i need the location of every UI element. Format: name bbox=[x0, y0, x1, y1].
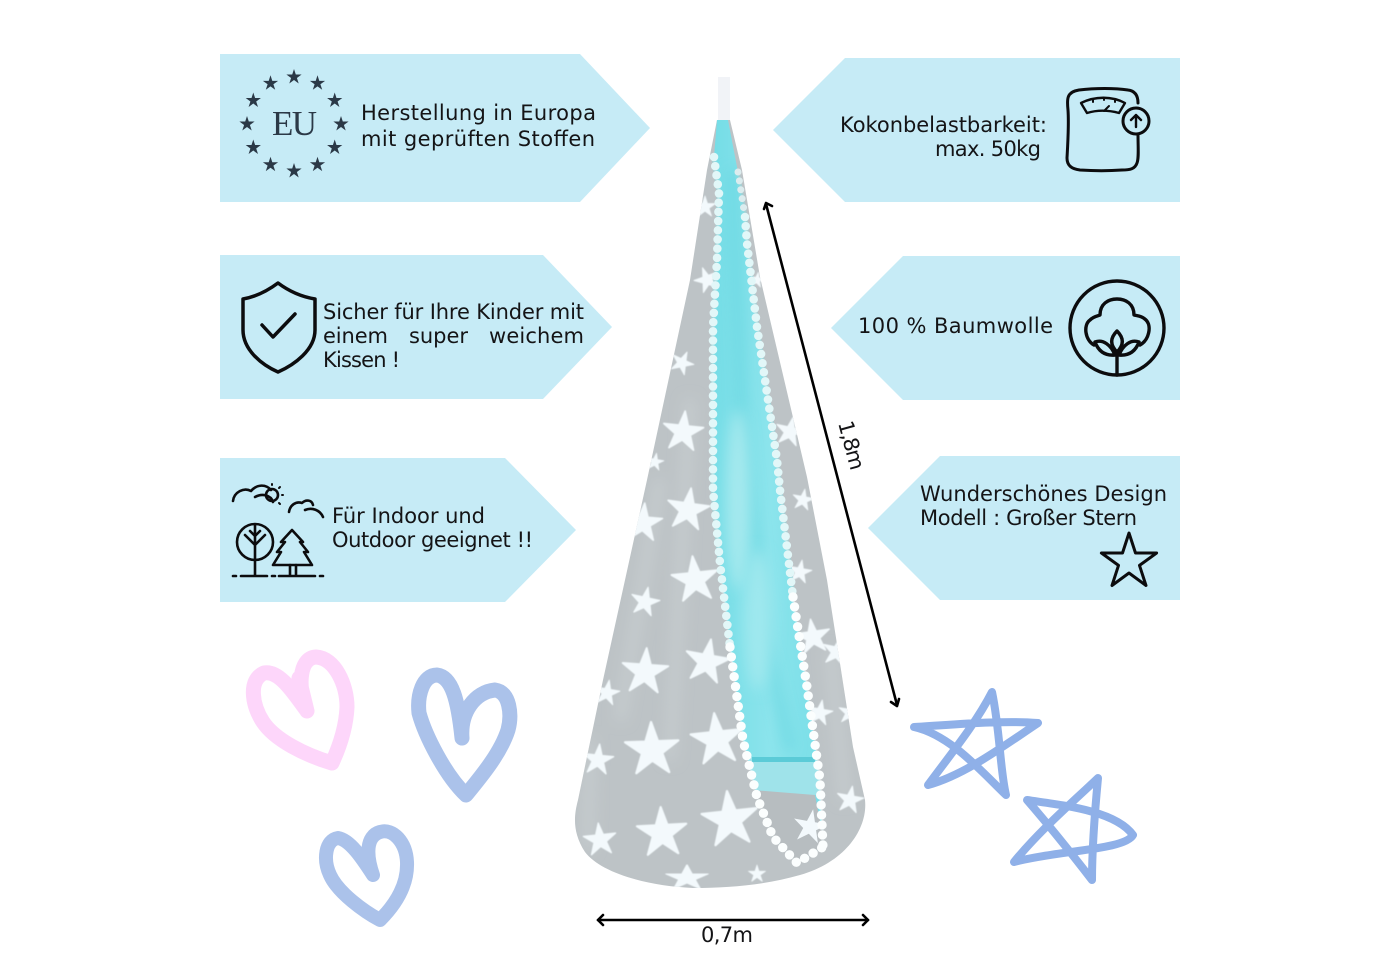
text: Kokonbelastbarkeit: max. 50kg bbox=[935, 137, 1041, 161]
label: height 1,8m: 1,8m bbox=[833, 418, 869, 473]
hanging cocoon photo bbox=[575, 77, 866, 888]
banner: 100 % Baumwolle bbox=[831, 256, 1180, 400]
doodle: pink heart bbox=[253, 657, 347, 763]
seat star bbox=[794, 810, 820, 843]
cocoon strap bbox=[718, 77, 730, 121]
doodle: small blue heart bbox=[326, 831, 407, 920]
cocoon body bbox=[575, 120, 866, 888]
doodle: blue heart bbox=[419, 675, 510, 795]
banner: Indoor und Outdoor bbox=[220, 458, 576, 602]
icon: shield with check bbox=[243, 283, 315, 372]
text: Herstellung in Europa: Herstellung in Europa bbox=[361, 101, 596, 125]
icon: cotton flower bbox=[1070, 281, 1164, 375]
icon: EU stars bbox=[239, 69, 349, 177]
cocoon pompoms bbox=[713, 157, 823, 863]
doodle: blue star two bbox=[1014, 778, 1133, 880]
arrow: width bbox=[598, 915, 868, 925]
doodle: blue star one bbox=[914, 692, 1038, 795]
banner: Wunderschönes Design bbox=[868, 456, 1180, 600]
cocoon teal interior bbox=[713, 120, 823, 856]
text: Sicher für Ihre Kinder: super bbox=[409, 324, 468, 348]
text: Sicher für Ihre Kinder: Sicher für Ihre Kinder mit bbox=[323, 300, 584, 324]
text: Indoor und Outdoor: Für Indoor und bbox=[332, 504, 485, 528]
banner: Kokonbelastbarkeit bbox=[773, 58, 1180, 202]
banner: Sicher für Ihre Kinder bbox=[220, 255, 612, 399]
text: Indoor und Outdoor: Outdoor geeignet !! bbox=[332, 528, 533, 552]
text: Kokonbelastbarkeit: Kokonbelastbarkeit: bbox=[840, 113, 1047, 137]
icon: weight scale bbox=[1067, 88, 1149, 171]
banner: Herstellung in Europa bbox=[220, 54, 650, 202]
arrow: height bbox=[764, 203, 899, 706]
text: Wunderschönes Design: Wunderschönes Design bbox=[920, 482, 1167, 506]
text: Wunderschönes Design: Modell : Großer Stern bbox=[920, 506, 1137, 530]
icon: clouds and trees bbox=[233, 484, 323, 576]
text: Sicher für Ihre Kinder: einem bbox=[323, 324, 388, 348]
text: 100 % Baumwolle: 100 % Baumwolle bbox=[858, 314, 1053, 338]
text: Sicher für Ihre Kinder: weichem bbox=[489, 324, 584, 348]
icon: EU stars: EU bbox=[272, 104, 317, 143]
text: Sicher für Ihre Kinder: Kissen ! bbox=[323, 348, 400, 372]
label: width 0,7m: 0,7m bbox=[701, 923, 753, 947]
text: Herstellung in Europa: mit geprüften Stoffen bbox=[361, 127, 595, 151]
icon: star outline bbox=[1101, 533, 1157, 586]
